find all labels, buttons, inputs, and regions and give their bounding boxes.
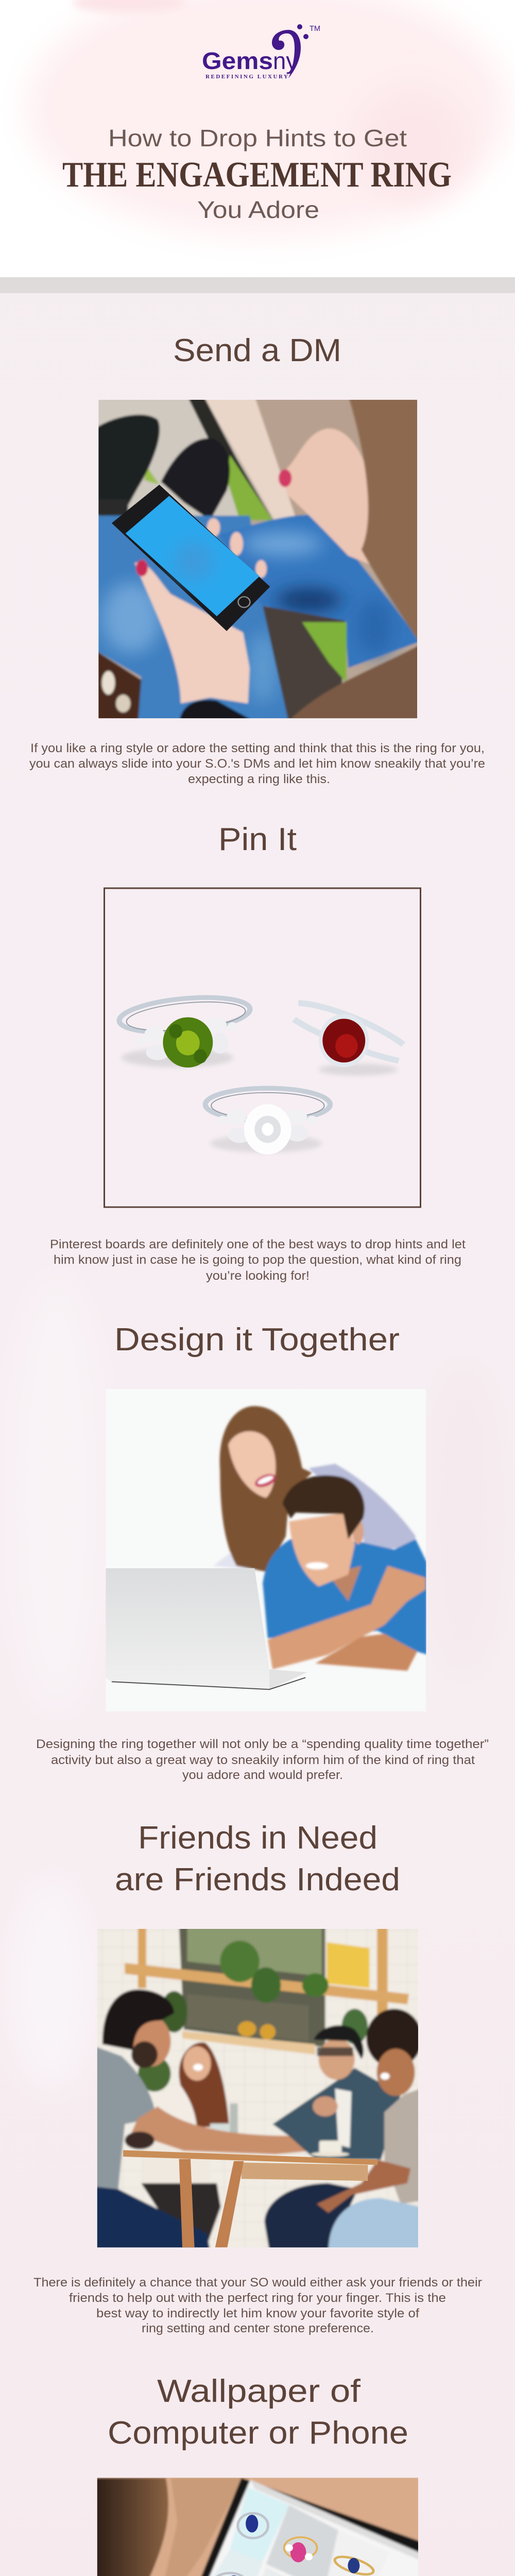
heading: Wallpaper of — [157, 2374, 361, 2409]
logo: Gemsny header: Gems — [202, 47, 273, 74]
logo: Gemsny header: TM — [310, 24, 320, 33]
body text: best way to indirectly let him know your favorite style of — [96, 2307, 419, 2320]
title: You Adore — [197, 196, 319, 223]
body text: expecting a ring like this. — [188, 772, 330, 786]
ring collage — [216, 2512, 375, 2576]
body text: you can always slide into your S.O.'s DMs and let him know sneakily that you’re — [29, 757, 485, 771]
photo: laptop with ring collage wallpaper — [92, 2476, 424, 2576]
body text — [33, 2276, 482, 2335]
header panel — [0, 0, 515, 277]
section: Design it Together — [36, 1322, 489, 1782]
body text: activity but also a great way to sneakily inform him of the kind of ring that — [51, 1753, 475, 1767]
logo: Gemsny header — [202, 24, 320, 80]
heading: Send a DM — [173, 333, 341, 368]
title: How to Drop Hints to Get — [108, 125, 407, 151]
laptop — [106, 1568, 307, 1689]
section: Send a DM — [29, 333, 485, 786]
body text — [36, 1737, 489, 1782]
section: Wallpaper — [97, 2379, 418, 2576]
heading — [108, 2374, 408, 2451]
divider band — [0, 277, 515, 293]
body text: ring setting and center stone preference. — [142, 2321, 374, 2335]
frame with rings — [104, 888, 420, 1207]
photo: woman holding phone — [95, 396, 420, 724]
logo: Gemsny header: ny — [273, 47, 298, 74]
ring: red garnet — [294, 1003, 403, 1076]
photo: friends at cafe table — [92, 1926, 424, 2251]
ring: white diamond — [205, 1088, 330, 1155]
body text: Designing the ring together will not only be a “spending quality time together” — [36, 1737, 489, 1751]
body text — [29, 741, 485, 786]
logo: Gemsny header: REDEFINING LUXURY — [205, 74, 288, 80]
cafe table — [123, 2150, 377, 2247]
heading: Computer or Phone — [108, 2415, 408, 2451]
section: Friends in Need — [33, 1820, 482, 2335]
body text: you adore and would prefer. — [182, 1768, 343, 1782]
section: Pin It — [50, 822, 466, 1283]
body text — [50, 1238, 466, 1283]
body text: friends to help out with the perfect ring for your finger. This is the — [69, 2291, 446, 2305]
phone — [112, 485, 270, 631]
body text: him know just in case he is going to pop the question, what kind of ring — [54, 1253, 461, 1267]
photo: couple at laptop — [106, 1389, 427, 1711]
heading: Design it Together — [114, 1322, 400, 1358]
heading: are Friends Indeed — [115, 1862, 400, 1897]
body text: you’re looking for! — [206, 1269, 310, 1283]
ring: green peridot — [117, 992, 252, 1067]
title: THE ENGAGEMENT RING — [62, 155, 452, 195]
heading: Pin It — [218, 822, 297, 857]
heading — [115, 1820, 400, 1897]
body text: If you like a ring style or adore the setting and think that this is the ring for you, — [30, 741, 485, 755]
heading: Friends in Need — [138, 1820, 377, 1856]
body text: There is definitely a chance that your SO would either ask your friends or their — [33, 2276, 482, 2290]
title — [62, 125, 452, 223]
body text: Pinterest boards are definitely one of the best ways to drop hints and let — [50, 1238, 466, 1251]
